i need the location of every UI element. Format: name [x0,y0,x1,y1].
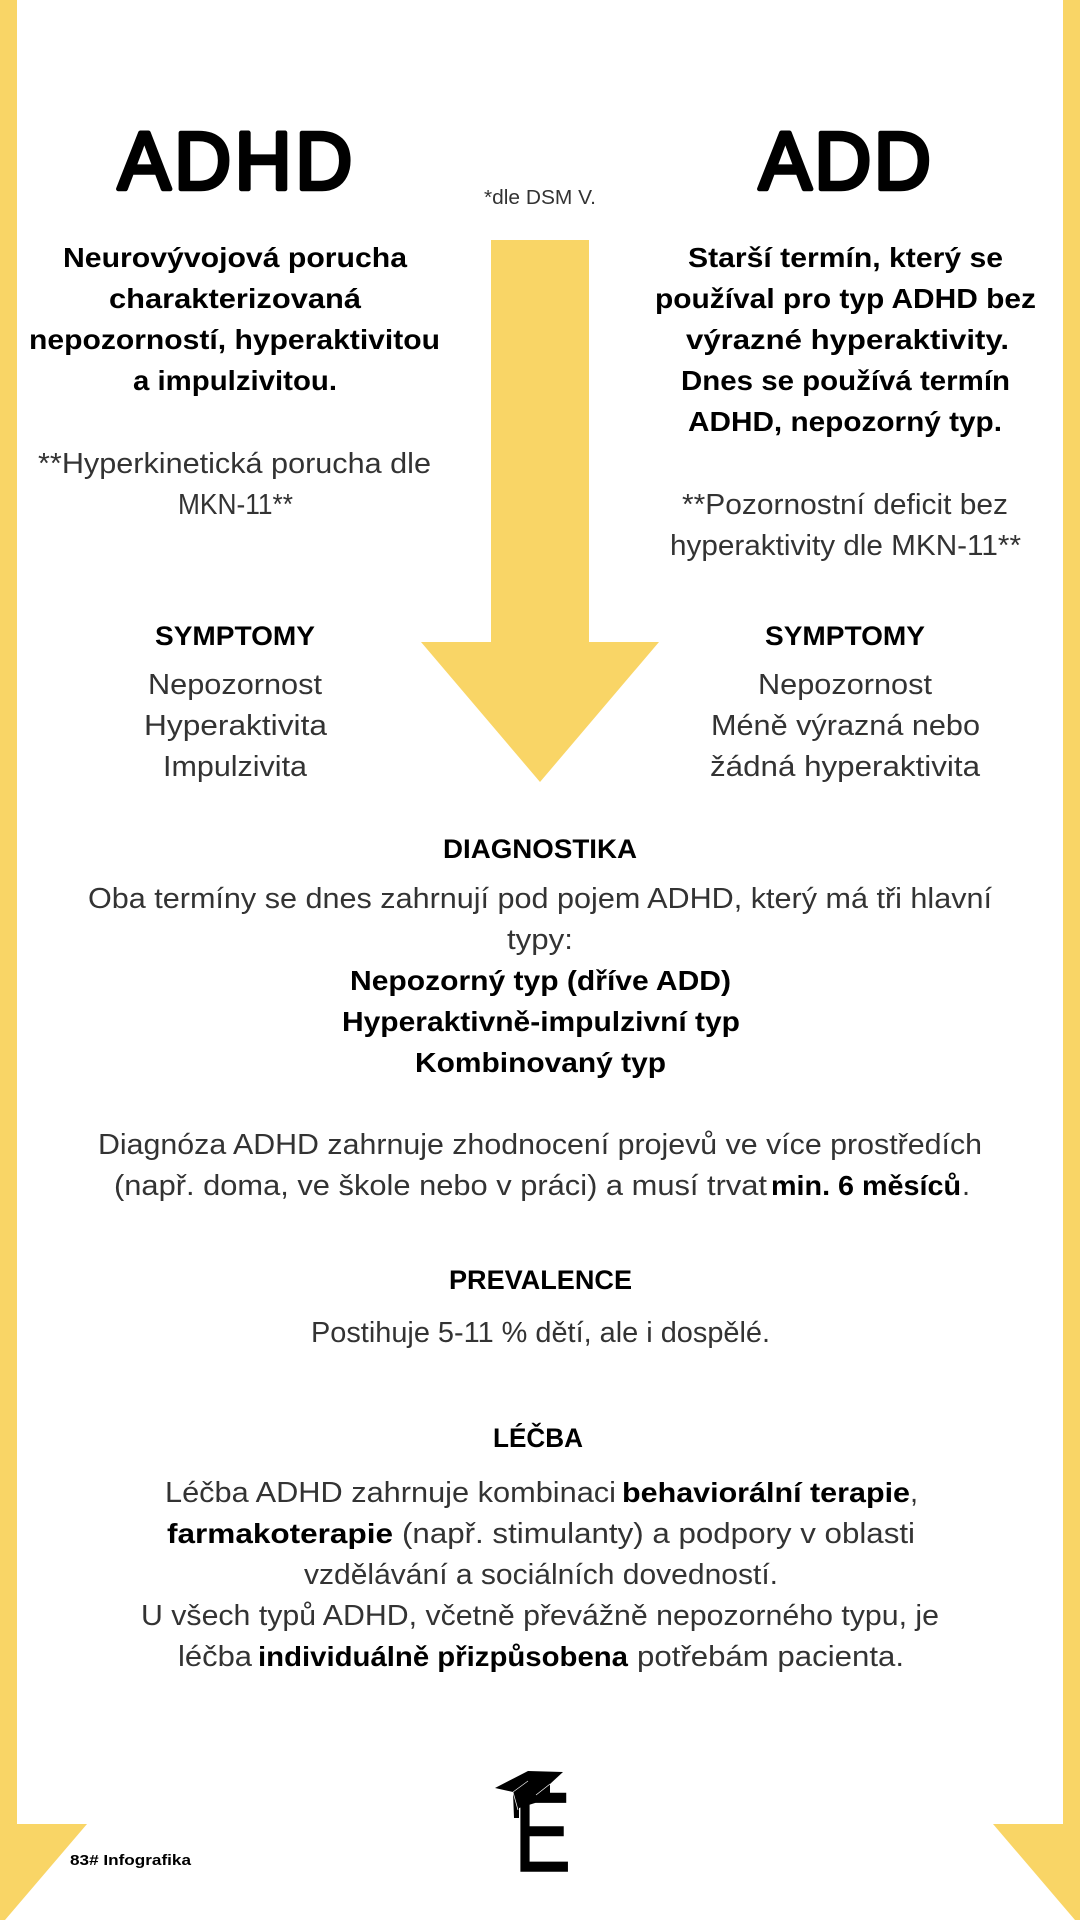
heading: léčba: LÉČBA [493,1422,583,1453]
text block: diagnosis criteria: (např. doma, ve škole nebo v práci) a musí trvat [114,1170,767,1202]
panel: ADHD definition: Neurovývojová porucha [63,242,407,273]
footer label: 83# Infografika [70,1852,192,1869]
title: ADHD: ADHD [118,116,352,207]
text block: types [88,883,992,1078]
panel: ADD definition: **Pozornostní deficit bez [682,489,1008,521]
panel: ADD symptoms: žádná hyperaktivita [710,751,981,783]
logo: E with graduation cap [495,1770,571,1895]
right yellow ribbon [993,0,1080,1920]
logo: E with graduation cap: E [514,1770,571,1895]
panel: ADD definition [655,242,1036,562]
text block: diagnosis criteria [98,1129,982,1202]
text block: types: Hyperaktivně-impulzivní typ [342,1006,740,1037]
note: DSM V: *dle DSM V. [484,187,596,209]
panel: ADD definition: výrazné hyperaktivity. [686,324,1009,355]
text block: treatment description: behaviorální terapie [622,1477,910,1508]
central down arrow [421,240,659,782]
panel: treatment [141,1422,939,1673]
panel: ADD definition: Dnes se používá termín [681,365,1010,396]
text block: treatment description: (např. stimulanty) a podpory v oblasti [402,1518,915,1550]
panel: ADHD definition: a impulzivitou. [133,365,337,396]
text block: treatment description: léčba [178,1641,253,1673]
panel: ADHD symptoms: Impulzivita [163,751,308,783]
panel: prevalence: Postihuje 5-11 % dětí, ale i dospělé. [311,1317,770,1349]
panel: prevalence [311,1265,770,1349]
panel: ADD symptoms: SYMPTOMY [765,621,925,651]
left yellow ribbon [0,0,87,1920]
panel: ADD definition: ADHD, nepozorný typ. [688,406,1002,437]
panel: ADHD definition: charakterizovaná [109,283,361,314]
panel: ADD symptoms: Méně výrazná nebo [711,710,980,742]
panel: ADD symptoms [710,621,981,783]
panel: ADD definition: Starší termín, který se [688,242,1003,273]
text block: treatment description: Léčba ADHD zahrnuje kombinaci [165,1477,616,1509]
text block: treatment description: potřebám pacienta. [637,1641,904,1673]
text block: diagnosis criteria: . [962,1170,970,1202]
text block: treatment description: vzdělávání a sociálních dovedností. [304,1559,778,1591]
panel: ADHD definition: MKN-11** [178,489,293,521]
text block: treatment description: U všech typů ADHD, včetně převážně nepozorného typu, je [141,1600,939,1632]
text block: types: Kombinovaný typ [415,1047,666,1078]
panel: ADHD definition [29,242,440,521]
text block: diagnosis criteria: min. 6 měsíců [771,1170,961,1201]
text block: diagnosis criteria: Diagnóza ADHD zahrnuje zhodnocení projevů ve více prostředích [98,1129,982,1161]
text block: types: Oba termíny se dnes zahrnují pod pojem ADHD, který má tři hlavní [88,883,992,915]
heading: diagnostika: DIAGNOSTIKA [443,834,637,864]
panel: diagnostics [88,834,992,1202]
panel: ADHD symptoms: Nepozornost [148,669,322,701]
panel: ADHD symptoms [144,621,328,783]
text block: types: typy: [507,924,573,956]
text block: treatment description: farmakoterapie [167,1518,393,1549]
text block: treatment description [141,1477,939,1673]
panel: prevalence: PREVALENCE [449,1265,632,1295]
panel: ADD definition: používal pro typ ADHD bez [655,283,1036,314]
title: ADD: ADD [759,116,931,207]
text block: types: Nepozorný typ (dříve ADD) [350,965,731,996]
panel: ADD symptoms: Nepozornost [758,669,932,701]
panel: ADD definition: hyperaktivity dle MKN-11** [670,530,1021,562]
panel: ADHD symptoms: SYMPTOMY [155,621,315,651]
panel: ADHD definition: **Hyperkinetická porucha dle [38,448,431,480]
panel: ADHD symptoms: Hyperaktivita [144,710,328,742]
text block: treatment description: individuálně přizpůsobena [258,1641,628,1672]
panel: ADHD definition: nepozorností, hyperaktivitou [29,324,440,355]
text block: treatment description: , [910,1477,918,1509]
